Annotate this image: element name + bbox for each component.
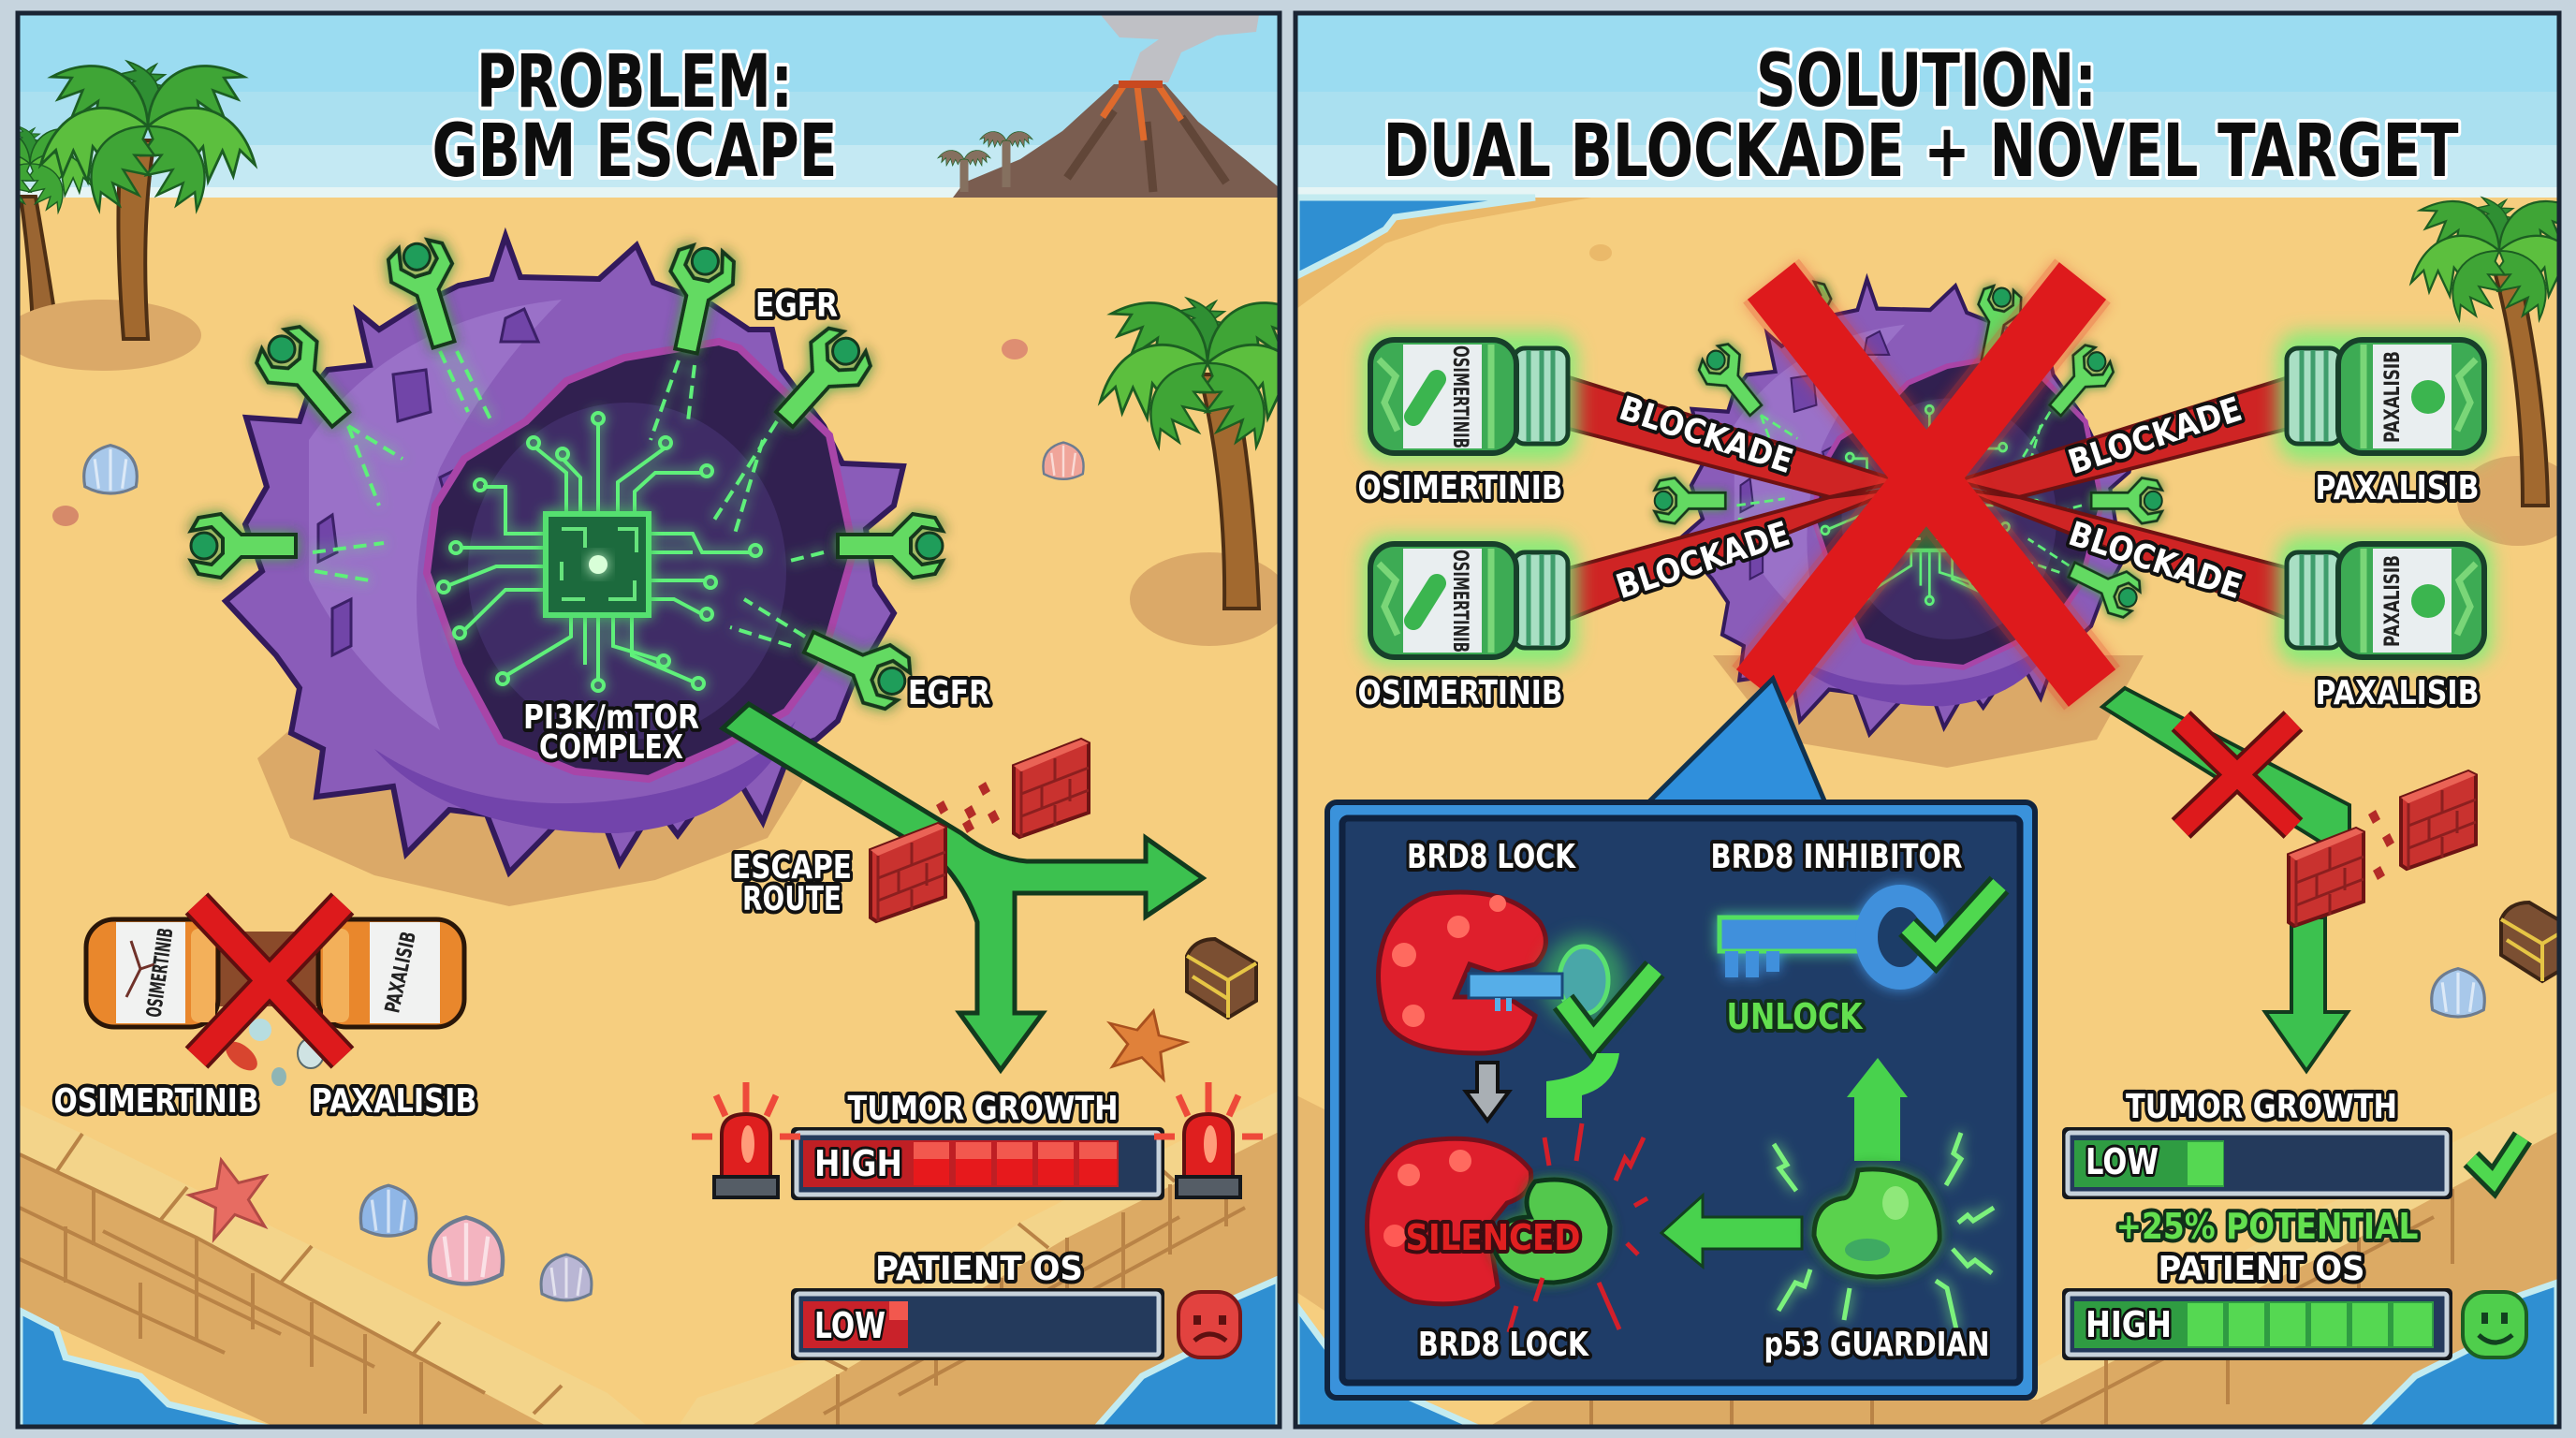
blockade band bottom right <box>1956 489 2306 626</box>
icon: red sparks <box>1509 1123 1647 1332</box>
bottle: osimertinib top <box>1362 331 1577 462</box>
panel: BRD8 mechanism callout <box>1327 802 2035 1398</box>
arrow: green up <box>1847 1058 1908 1161</box>
label: paxalisib top: PAXALISIB <box>2316 469 2479 507</box>
title: problem: GBM ESCAPE <box>432 110 837 194</box>
blockade band bottom left <box>1551 489 1900 626</box>
pill bottle: osimertinib <box>86 919 218 1027</box>
label: blockade top left: BLOCKADE <box>1615 389 1797 481</box>
status bar: tumor growth high <box>791 1127 1164 1200</box>
heading: patient OS: PATIENT OS <box>875 1250 1083 1288</box>
icon: alarm right <box>1154 1082 1263 1197</box>
sand <box>20 198 1279 1433</box>
icon: palm tree, right <box>1097 296 1277 646</box>
label: paxalisib bottom: PAXALISIB <box>2316 674 2479 712</box>
arrow: green curved <box>1546 1053 1619 1118</box>
blockade band top right <box>1956 372 2306 497</box>
label: EGFR: EGFR <box>755 286 838 325</box>
icon: brick walls <box>2289 771 2476 926</box>
blockade band top left <box>1551 372 1900 497</box>
label: blockade bottom left: BLOCKADE <box>1612 515 1794 607</box>
sea, top left <box>1296 198 1591 309</box>
icon: check mark on blue key <box>1908 885 1999 955</box>
panel: solution <box>1296 15 2576 1433</box>
label: low: LOW <box>814 1305 886 1346</box>
panel frame: solution <box>1295 13 2559 1427</box>
heading: patient OS: PATIENT OS <box>2159 1250 2364 1288</box>
icon: red X core <box>2181 721 2293 829</box>
bottle: osimertinib top: OSIMERTINIB <box>1448 345 1471 448</box>
label: high: HIGH <box>814 1143 902 1184</box>
icon: red X over escape route <box>2181 721 2293 829</box>
bottle: paxalisib bottom <box>2277 536 2493 666</box>
arrow: escape route <box>723 704 1203 1070</box>
icon: happy face <box>2463 1292 2526 1357</box>
icon: volcano <box>938 15 1279 198</box>
pill bottle: paxalisib: PAXALISIB <box>381 930 421 1015</box>
status bar: patient OS low <box>791 1288 1164 1360</box>
label: BRD8 lock: BRD8 LOCK <box>1407 838 1576 876</box>
icon: BRD8 lock with key <box>1378 892 1626 1053</box>
beach decorations <box>1589 244 2570 1017</box>
icon: alarm left <box>692 1082 800 1197</box>
large red X <box>1760 281 2092 688</box>
icon: palm tree <box>2401 186 2576 546</box>
label: osimertinib: OSIMERTINIB <box>54 1082 258 1121</box>
pill bottle: paxalisib <box>318 919 464 1027</box>
bottle: paxalisib bottom: PAXALISIB <box>2381 555 2405 647</box>
icon: blue key <box>1720 896 1934 978</box>
bottle: paxalisib top <box>2277 331 2493 462</box>
sea, bottom <box>1296 1283 2557 1432</box>
icon: check mark core <box>2471 1137 2523 1181</box>
title: problem <box>432 49 837 181</box>
icon: silenced BRD8 lock <box>1367 1138 1531 1304</box>
label: silenced: SILENCED <box>1406 1217 1580 1258</box>
tumor cell with EGFR receptors and PI3K/mTOR chip <box>191 235 943 873</box>
icon: check mark core <box>1563 969 1655 1041</box>
status bar: tumor growth low <box>2062 1127 2452 1199</box>
label: PI3K/mTOR complex: PI3K/mTOR <box>523 698 699 737</box>
bottle: paxalisib top: PAXALISIB <box>2381 351 2405 443</box>
arrow: green left <box>1661 1196 1802 1267</box>
title: solution: SOLUTION: <box>1756 39 2097 124</box>
callout pointer <box>1646 679 1826 805</box>
icon: check mark core <box>1908 885 1999 955</box>
label: BRD8 lock lower: BRD8 LOCK <box>1418 1326 1589 1364</box>
label: BRD8 inhibitor: BRD8 INHIBITOR <box>1711 838 1962 876</box>
icon: green protein bound <box>1493 1180 1610 1283</box>
label: escape route <box>732 848 852 918</box>
panel: problem <box>0 15 1327 1433</box>
sky <box>1296 15 2557 198</box>
label: osimertinib top: OSIMERTINIB <box>1357 469 1563 507</box>
bottle: osimertinib bottom <box>1362 536 1577 666</box>
heading: tumor growth: TUMOR GROWTH <box>848 1090 1118 1128</box>
tumor cell behind blockade <box>1655 278 2162 734</box>
bottle: osimertinib bottom: OSIMERTINIB <box>1448 550 1471 653</box>
arrow: grey down <box>1466 1063 1509 1121</box>
cell shadow <box>1713 655 2144 768</box>
label: blockade top right: BLOCKADE <box>2064 390 2247 482</box>
icon: palm tree, cropped left <box>21 126 91 312</box>
label: EGFR lower: EGFR <box>908 674 990 712</box>
arrow: blocked escape route <box>2102 688 2349 1071</box>
icon: broken pill bottles crossed out <box>86 903 464 1086</box>
icon: check mark <box>2471 1137 2523 1181</box>
label: paxalisib: PAXALISIB <box>311 1082 477 1121</box>
stone wall <box>20 1091 1279 1432</box>
label: osimertinib bottom: OSIMERTINIB <box>1357 674 1563 712</box>
sea <box>20 1279 1279 1432</box>
sand <box>1296 198 2557 1433</box>
label: unlock: UNLOCK <box>1726 996 1864 1037</box>
stone wall <box>1296 1091 2557 1432</box>
label: escape route: ESCAPE <box>732 848 852 887</box>
label: high: HIGH <box>2086 1304 2172 1345</box>
label: escape route: ROUTE <box>742 880 842 918</box>
icon: sad face <box>1178 1292 1240 1357</box>
panel frame: problem <box>18 13 1280 1427</box>
title: solution <box>1383 39 2458 194</box>
icon: broken brick walls <box>871 740 1089 921</box>
heading: tumor growth: TUMOR GROWTH <box>2126 1088 2397 1126</box>
beach decorations <box>52 339 1256 1300</box>
label: PI3K/mTOR complex: COMPLEX <box>539 728 683 767</box>
spilled pills <box>221 1019 324 1086</box>
icon: check mark on key <box>1563 969 1655 1041</box>
label: low: LOW <box>2086 1141 2159 1182</box>
cell shadow <box>257 730 803 906</box>
pill bottle: osimertinib: OSIMERTINIB <box>143 927 179 1019</box>
title: problem: PROBLEM: <box>476 40 793 125</box>
icon: p53 guardian <box>1774 1133 1994 1329</box>
red X <box>197 903 343 1058</box>
label: +25% potential: +25% POTENTIAL <box>2115 1206 2419 1247</box>
label: p53 guardian: p53 GUARDIAN <box>1764 1326 1990 1364</box>
label: PI3K/mTOR complex <box>523 698 699 767</box>
label: blockade bottom right: BLOCKADE <box>2064 515 2247 607</box>
icon: palm tree, left <box>21 60 258 371</box>
sky <box>20 15 1279 198</box>
status bar: patient OS high <box>2062 1288 2452 1360</box>
